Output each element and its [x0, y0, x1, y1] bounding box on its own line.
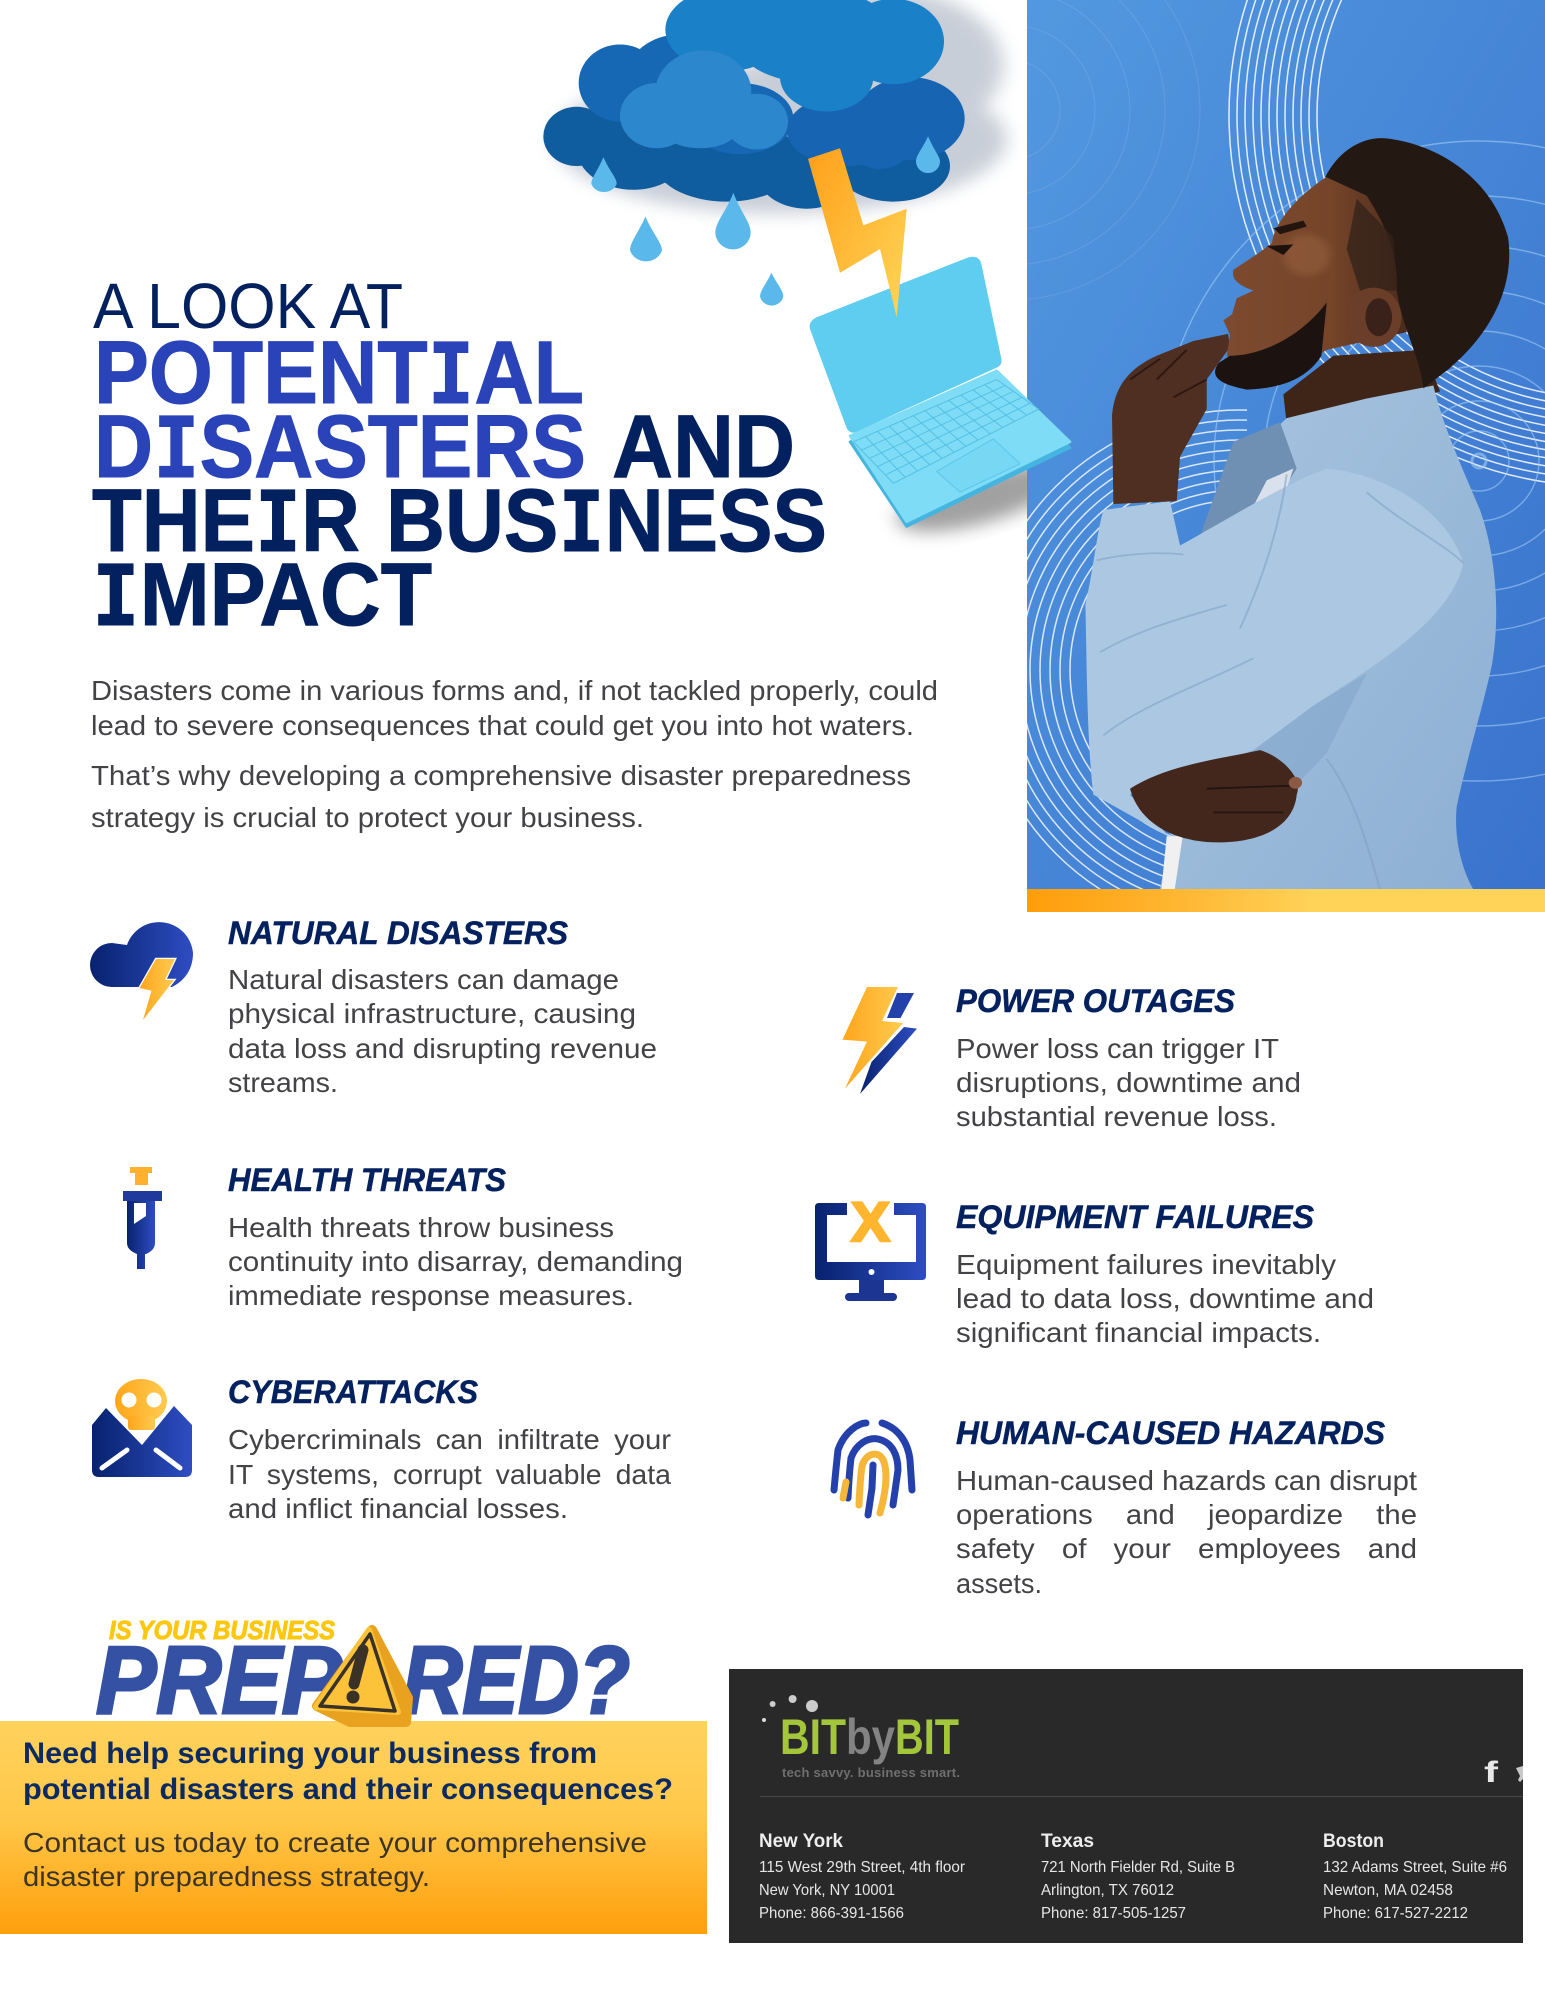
neck [1283, 350, 1440, 424]
ear [1345, 288, 1401, 347]
panel: hero photo with man on blue background [1027, 0, 1545, 889]
column: New York: New York [759, 1831, 843, 1852]
dark background [729, 1669, 1523, 1943]
icon: fingerprint [834, 1423, 912, 1515]
heading: POWER OUTAGES [956, 983, 1236, 1019]
logo: BIT [780, 1709, 846, 1765]
CTA body: disaster preparedness strategy. [23, 1861, 430, 1892]
description [956, 1465, 1417, 1599]
description: lead to data loss, downtime and [956, 1283, 1374, 1314]
description: disruptions, downtime and [956, 1067, 1301, 1098]
icon: envelope with skull [92, 1379, 192, 1477]
is your business prepared heading [96, 1615, 630, 1734]
item: human-caused hazards [834, 1415, 1417, 1599]
raised arm and hand [1112, 334, 1230, 504]
column: Texas: 721 North Fielder Rd, Suite B [1041, 1859, 1235, 1876]
intro text: strategy is crucial to protect your business. [91, 802, 644, 833]
CTA heading: potential disasters and their consequences? [23, 1773, 673, 1806]
intro text: Disasters come in various forms and, if not tackled properly, could [91, 675, 938, 706]
CTA heading [23, 1737, 673, 1806]
title line 1: A LOOK AT [93, 270, 403, 342]
concentric line rings [820, 0, 1545, 930]
description: assets. [956, 1568, 1042, 1599]
CTA body: Contact us today to create your comprehensive [23, 1827, 647, 1858]
blue background [1027, 0, 1545, 889]
sleeve shading and folds [1097, 474, 1463, 890]
divider [760, 1796, 1523, 1797]
footer panel: company contact [729, 1669, 1530, 1943]
description: IT systems, corrupt valuable data [228, 1459, 671, 1490]
title line 4: THEIR [92, 470, 360, 571]
description [956, 1033, 1301, 1132]
intro text: That’s why developing a comprehensive disaster preparedness [91, 760, 911, 791]
prepared right: RED? [402, 1627, 630, 1734]
column: Boston: Boston [1323, 1831, 1384, 1852]
CTA body [23, 1827, 647, 1892]
keyboard [853, 380, 1039, 483]
column: New York: 115 West 29th Street, 4th floor [759, 1859, 966, 1876]
laptop shadow [889, 451, 1071, 546]
icon: monitor with X: X [851, 1190, 890, 1253]
right mid cloud [787, 77, 965, 169]
back dark cloud [543, 107, 950, 209]
yellow gradient panel [0, 1721, 707, 1934]
shirt torso [1160, 385, 1496, 890]
column: Texas [1041, 1831, 1235, 1922]
column: New York [759, 1831, 966, 1922]
description: immediate response measures. [228, 1280, 634, 1311]
description: significant financial impacts. [956, 1317, 1321, 1348]
lightning bolt [808, 148, 907, 317]
icon: cloud with lightning [90, 922, 193, 1020]
column: New York: Phone: 866-391-1566 [759, 1905, 904, 1922]
rain drops [591, 136, 940, 306]
item: health threats [123, 1162, 683, 1311]
laptop [810, 257, 1070, 527]
column: Boston [1323, 1831, 1507, 1922]
description: Natural disasters can damage [228, 964, 619, 995]
sleeve [1085, 468, 1463, 837]
description: and inflict financial losses. [228, 1493, 568, 1524]
column: Boston: Phone: 617-527-2212 [1323, 1905, 1468, 1922]
cloud shadow [553, 0, 1007, 213]
heading: CYBERATTACKS [228, 1374, 479, 1410]
illustration: storm cloud over laptop [543, 0, 1070, 527]
column: Boston: Newton, MA 02458 [1323, 1882, 1453, 1899]
title line 3: DISASTERS [94, 396, 586, 497]
social icons [1484, 1760, 1523, 1782]
title line 2: POTENTIAL [94, 322, 584, 423]
hair [1325, 138, 1509, 388]
collar and placket [1180, 422, 1297, 611]
description: continuity into disarray, demanding [228, 1246, 683, 1277]
lower hand [1130, 750, 1298, 842]
logo: BIT [895, 1709, 959, 1765]
description: streams. [228, 1067, 338, 1098]
front light cloud [620, 50, 788, 149]
laptop base [850, 371, 1070, 522]
title line 5: IMPACT [92, 544, 432, 645]
description [228, 964, 657, 1098]
description [956, 1249, 1374, 1348]
hair fade [1347, 199, 1397, 291]
heading: NATURAL DISASTERS [228, 915, 569, 951]
icon: monitor with X [815, 1190, 926, 1301]
item: equipment failures [815, 1190, 1374, 1348]
description: physical infrastructure, causing [228, 998, 636, 1029]
face [1223, 177, 1407, 388]
beard [1215, 302, 1327, 390]
left mid cloud [579, 34, 793, 154]
intro text: lead to severe consequences that could get you into hot waters. [91, 710, 914, 741]
title line 4: BUSINESS [386, 470, 827, 571]
description: Equipment failures inevitably [956, 1249, 1336, 1280]
description: substantial revenue loss. [956, 1101, 1277, 1132]
icon: warning triangle [316, 1630, 408, 1722]
title [92, 270, 827, 645]
heading: EQUIPMENT FAILURES [956, 1199, 1315, 1235]
description: data loss and disrupting revenue [228, 1033, 657, 1064]
description: safety of your employees and [956, 1533, 1417, 1564]
call to action box [0, 1721, 707, 1934]
social icons: f [1484, 1756, 1499, 1789]
top cloud [665, 0, 944, 111]
column: New York: New York, NY 10001 [759, 1882, 895, 1899]
laptop screen [810, 257, 1002, 433]
column: Texas: Phone: 817-505-1257 [1041, 1905, 1186, 1922]
column: Texas: Arlington, TX 76012 [1041, 1882, 1174, 1899]
trackpad [937, 439, 1020, 492]
title line 3: AND [612, 396, 795, 496]
CTA heading: Need help securing your business from [23, 1737, 597, 1770]
description [228, 1212, 683, 1311]
item: natural disasters [90, 915, 657, 1098]
column: Texas: Texas [1041, 1831, 1094, 1852]
column: Boston: 132 Adams Street, Suite #6 [1323, 1859, 1507, 1876]
description: operations and jeopardize the [956, 1499, 1417, 1530]
heading: HEALTH THREATS [228, 1162, 507, 1198]
eye and brow [1267, 244, 1293, 255]
man thinking [1085, 138, 1509, 890]
description: Human-caused hazards can disrupt [956, 1465, 1417, 1496]
description: Power loss can trigger IT [956, 1033, 1279, 1064]
description: Cybercriminals can infiltrate your [228, 1424, 671, 1455]
logo [762, 1695, 960, 1780]
logo: by [846, 1709, 895, 1765]
title line 4 [92, 470, 827, 571]
icon: power bolt [842, 987, 917, 1094]
cheek highlight [1283, 234, 1330, 276]
description: Health threats throw business [228, 1212, 614, 1243]
intro text [91, 675, 938, 833]
item: power outages [842, 983, 1301, 1132]
description [228, 1424, 671, 1524]
logo: tech savvy. business smart. [782, 1765, 960, 1780]
laptop base edge [850, 377, 1070, 527]
prepared left: PREP [96, 1627, 343, 1734]
kicker: IS YOUR BUSINESS [109, 1615, 336, 1645]
orange accent bar [1027, 889, 1545, 912]
icon: syringe [123, 1167, 162, 1269]
heading: HUMAN-CAUSED HAZARDS [956, 1415, 1386, 1451]
item: cyberattacks [92, 1374, 671, 1524]
